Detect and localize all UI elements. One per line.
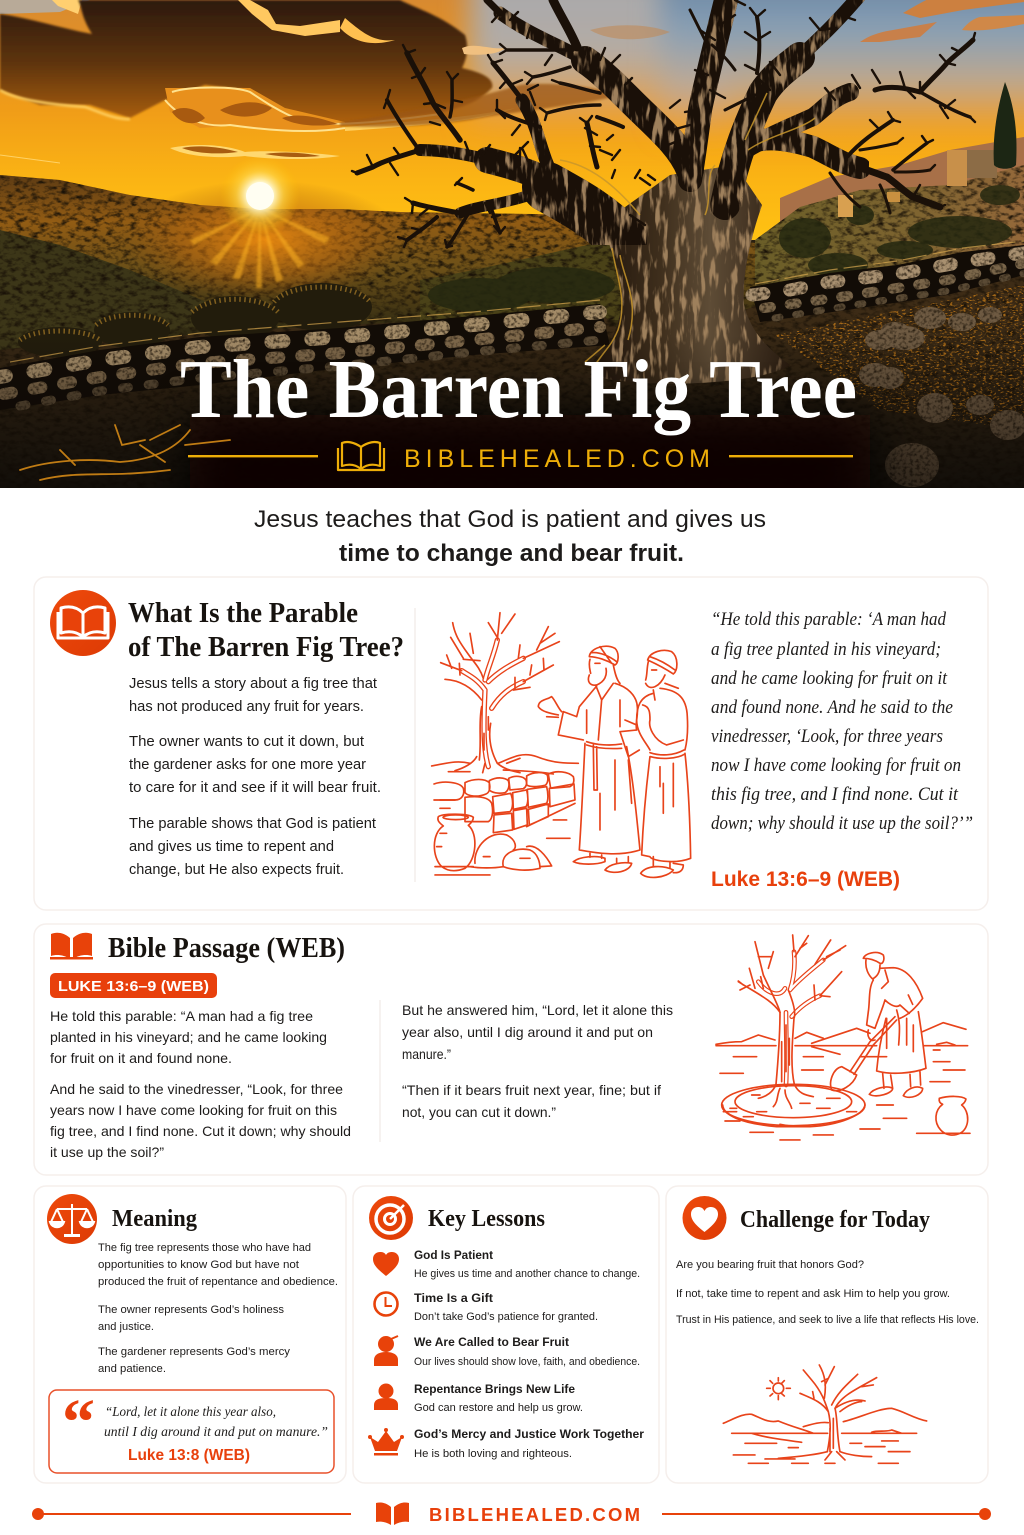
icon: target bbox=[369, 1196, 413, 1240]
lesson: repentance bbox=[374, 1382, 583, 1414]
callout: quote: until I dig around it and put on manure.” bbox=[104, 1424, 328, 1439]
hills and fields bbox=[0, 165, 1024, 488]
tagline: time to change and bear fruit. bbox=[339, 540, 684, 567]
soil roots bbox=[20, 425, 230, 480]
scripture quote: down; why should it use up the soil?’” bbox=[711, 814, 973, 834]
icon: quotation marks: “ bbox=[62, 1386, 95, 1459]
scripture quote: now I have come looking for fruit on bbox=[711, 756, 961, 776]
lesson: bear fruit: We Are Called to Bear Fruit bbox=[414, 1335, 569, 1349]
title shade bbox=[0, 335, 1024, 488]
meaning text: The owner represents God’s holiness bbox=[98, 1304, 284, 1316]
site name: BIBLEHEALED.COM bbox=[404, 445, 710, 473]
bushes bbox=[18, 283, 372, 357]
challenge text: Are you bearing fruit that honors God? bbox=[676, 1259, 864, 1271]
scripture quote: a fig tree planted in his vineyard; bbox=[711, 640, 941, 660]
lesson: time bbox=[374, 1291, 598, 1323]
passage right column: not, you can cut it down.” bbox=[402, 1104, 556, 1120]
hero rule left bbox=[188, 455, 318, 457]
clouds bbox=[0, 0, 1024, 163]
illustration: owner and gardener by the fig tree bbox=[432, 613, 691, 877]
passage left column: And he said to the vinedresser, “Look, for three bbox=[50, 1081, 343, 1097]
meaning text: and patience. bbox=[98, 1363, 166, 1375]
far ridge on the right bbox=[780, 137, 1024, 230]
passage left column: fig tree, and I find none. Cut it down; why should bbox=[50, 1123, 351, 1139]
tree twigs bbox=[352, 0, 975, 247]
challenge text: If not, take time to repent and ask Him to help you grow. bbox=[676, 1288, 950, 1300]
scripture quote: vinedresser, ‘Look, for three years bbox=[711, 727, 943, 747]
passage right column: But he answered him, “Lord, let it alone this bbox=[402, 1002, 673, 1018]
heading: Bible Passage (WEB) bbox=[108, 933, 345, 964]
passage right column: year also, until I dig around it and put on bbox=[402, 1024, 653, 1040]
lesson: repentance: Repentance Brings New Life bbox=[414, 1382, 575, 1396]
meaning text: produced the fruit of repentance and obedience. bbox=[98, 1276, 338, 1288]
scripture quote: and he came looking for fruit on it bbox=[711, 669, 948, 689]
panel: what is the parable bbox=[34, 577, 988, 910]
panel: meaning bbox=[34, 1186, 346, 1483]
divider bbox=[414, 608, 416, 882]
meaning text bbox=[98, 1242, 338, 1375]
passage left column: for fruit on it and found none. bbox=[50, 1050, 232, 1066]
meaning text: and justice. bbox=[98, 1321, 154, 1333]
site name: BIBLEHEALED.COM bbox=[429, 1504, 640, 1525]
reference pill bbox=[50, 973, 217, 998]
lesson: mercy and justice: God’s Mercy and Justice Work Together bbox=[414, 1427, 644, 1441]
explanation text: change, but He also expects fruit. bbox=[129, 862, 344, 878]
explanation text: Jesus tells a story about a fig tree that bbox=[129, 676, 377, 692]
icon: red book bbox=[50, 933, 93, 960]
reference pill: LUKE 13:6–9 (WEB) bbox=[58, 978, 209, 995]
passage left column: years now I have come looking for fruit on this bbox=[50, 1102, 337, 1118]
icon: footer book bbox=[376, 1502, 409, 1525]
scripture quote bbox=[711, 610, 973, 834]
callout: quote: Luke 13:8 (WEB) bbox=[128, 1447, 250, 1464]
icon: scales bbox=[47, 1194, 97, 1244]
heading: Key Lessons bbox=[428, 1206, 545, 1232]
scripture quote: and found none. And he said to the bbox=[711, 698, 953, 718]
explanation text: The owner wants to cut it down, but bbox=[129, 734, 364, 750]
passage left column bbox=[50, 1008, 351, 1160]
tagline: Jesus teaches that God is patient and gives us bbox=[254, 506, 766, 533]
scripture quote: “He told this parable: ‘A man had bbox=[711, 610, 947, 630]
title: The Barren Fig Tree bbox=[180, 343, 857, 436]
explanation text: to care for it and see if it will bear fruit. bbox=[129, 780, 381, 796]
illustration: tree and sun bbox=[723, 1365, 927, 1463]
meaning text: The gardener represents God’s mercy bbox=[98, 1346, 291, 1358]
passage right column bbox=[402, 1002, 673, 1120]
divider bbox=[380, 1000, 381, 1142]
explanation text: the gardener asks for one more year bbox=[129, 757, 366, 773]
callout: quote bbox=[49, 1386, 334, 1473]
golden bark highlights bbox=[560, 93, 815, 365]
passage left column: planted in his vineyard; and he came looking bbox=[50, 1029, 327, 1045]
lesson: bear fruit bbox=[374, 1335, 640, 1368]
icon: gold open book bbox=[338, 442, 384, 470]
rocky orange soil bbox=[775, 285, 1024, 487]
explanation text: The parable shows that God is patient bbox=[129, 816, 376, 832]
passage left column: He told this parable: “A man had a fig tree bbox=[50, 1008, 313, 1024]
hero: sunset landscape with barren fig tree bbox=[0, 0, 1024, 525]
illustration: gardener digging around the tree bbox=[716, 935, 970, 1140]
lesson: time: Time Is a Gift bbox=[414, 1291, 493, 1305]
sun glow and rays bbox=[134, 157, 394, 297]
lesson: mercy and justice: He is both loving and righteous. bbox=[414, 1448, 572, 1460]
meaning text: opportunities to know God but have not bbox=[98, 1259, 299, 1271]
callout: quote: “Lord, let it alone this year also, bbox=[105, 1404, 276, 1419]
panel: key lessons bbox=[353, 1186, 659, 1483]
explanation text: has not produced any fruit for years. bbox=[129, 699, 364, 715]
challenge text: Trust in His patience, and seek to live a life that reflects His love. bbox=[676, 1314, 979, 1326]
stone wall bbox=[0, 241, 1024, 410]
lesson: patience: God Is Patient bbox=[414, 1248, 493, 1262]
hero rule right bbox=[729, 455, 853, 457]
meaning text: The fig tree represents those who have had bbox=[98, 1242, 311, 1254]
footer bbox=[32, 1502, 991, 1525]
fig tree bbox=[352, 0, 975, 384]
scripture quote: this fig tree, and I find none. Cut it bbox=[711, 785, 959, 805]
explanation text bbox=[129, 676, 381, 878]
icon: open book disc bbox=[50, 590, 116, 656]
heading: of The Barren Fig Tree? bbox=[128, 632, 404, 663]
building and cypress bbox=[838, 82, 1017, 217]
lesson: time: Don’t take God’s patience for granted. bbox=[414, 1311, 598, 1323]
lesson: patience bbox=[373, 1248, 640, 1280]
lesson: bear fruit: Our lives should show love, faith, and obedience. bbox=[414, 1356, 640, 1368]
panel: bible passage bbox=[34, 924, 988, 1175]
tagline bbox=[254, 506, 766, 567]
heading bbox=[128, 598, 404, 663]
heading: Meaning bbox=[112, 1206, 197, 1232]
reference: Luke 13:6–9 (WEB) bbox=[711, 868, 900, 891]
challenge text bbox=[676, 1259, 979, 1326]
passage right column: manure.” bbox=[402, 1046, 451, 1062]
heading: What Is the Parable bbox=[128, 598, 358, 629]
passage left column: it use up the soil?” bbox=[50, 1144, 164, 1160]
lesson: repentance: God can restore and help us grow. bbox=[414, 1402, 583, 1414]
lesson: mercy and justice bbox=[368, 1427, 644, 1460]
panel: challenge for today bbox=[666, 1186, 988, 1483]
explanation text: and gives us time to repent and bbox=[129, 839, 334, 855]
passage right column: “Then if it bears fruit next year, fine; but if bbox=[402, 1082, 661, 1098]
heading: Challenge for Today bbox=[740, 1207, 930, 1233]
lesson: patience: He gives us time and another chance to change. bbox=[414, 1268, 640, 1280]
icon: heart disc bbox=[682, 1196, 726, 1240]
